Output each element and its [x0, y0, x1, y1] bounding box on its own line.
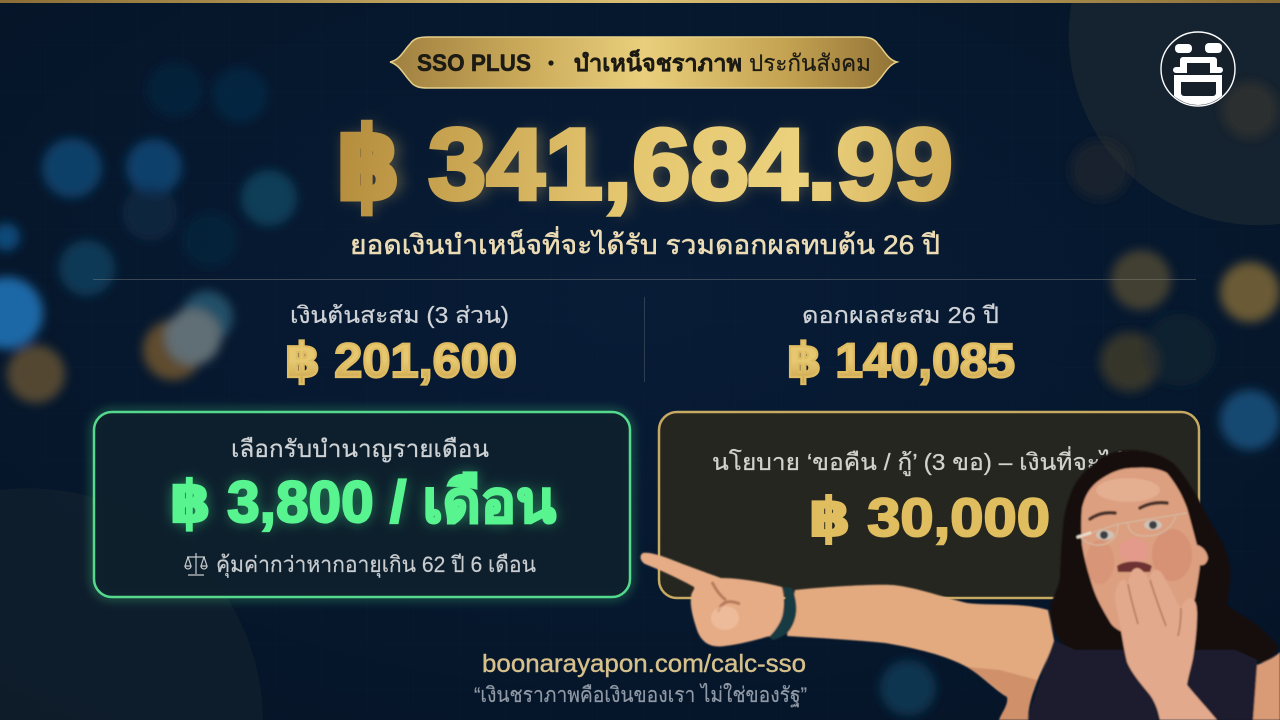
mouth shadow: [1117, 562, 1152, 572]
total amount: ฿ 341,684.99: [337, 109, 953, 221]
panel: monthly pension: คุ้มค่ากว่าหากอายุเกิน 62 ปี 6 เดือน: [216, 552, 536, 578]
divider: [93, 279, 1196, 280]
panel: monthly pension: เลือกรับบำนาญรายเดือน: [231, 436, 489, 463]
stat: principal: [285, 302, 517, 388]
cheek and forehead tones: [1152, 529, 1192, 581]
right shoulder: [1253, 652, 1280, 720]
total amount: ฿: [337, 109, 400, 221]
glasses: [1078, 513, 1187, 545]
panel: monthly pension: [94, 412, 630, 597]
icon: scales: [185, 553, 207, 575]
pointing hand: [641, 553, 784, 646]
badge: SSO PLUS: บำเหน็จชราภาพ: [574, 48, 742, 76]
person pointing: [641, 450, 1280, 720]
panel: monthly pension: ฿ 3,800 / เดือน: [170, 470, 556, 535]
finger lines: [1128, 580, 1181, 636]
logo badge: [1161, 32, 1235, 107]
wristband: [769, 587, 796, 640]
top gold bar: [0, 0, 1280, 3]
arm: [787, 585, 1054, 720]
badge: SSO PLUS: SSO PLUS: [417, 50, 531, 77]
panel: withdrawal policy: [659, 412, 1199, 598]
eyebrows: [1090, 503, 1167, 519]
stat: principal: เงินต้นสะสม (3 ส่วน): [290, 302, 509, 328]
footer quote: “เงินชราภาพคือเงินของเรา ไม่ใช่ของรัฐ”: [474, 683, 807, 707]
panel: withdrawal policy: ฿ 30,000: [809, 488, 1050, 548]
badge: SSO PLUS: ประกันสังคม: [749, 50, 871, 76]
stat: principal: ฿ 201,600: [285, 335, 517, 388]
stat: interest: ดอกผลสะสม 26 ปี: [802, 302, 999, 328]
total amount: 341,684.99: [428, 109, 953, 221]
hand over mouth: [1115, 568, 1217, 720]
stat: interest: ฿ 140,085: [787, 335, 1015, 388]
eyes: [1096, 530, 1114, 540]
subtitle: ยอดเงินบำเหน็จที่จะได้รับ รวมดอกผลทบต้น 26 ปี: [350, 226, 940, 260]
face: [1081, 468, 1208, 636]
panel: monthly pension: ฿ 3,800 / เดือน: [170, 470, 556, 535]
tank top: [1028, 640, 1257, 720]
footer link: boonarayapon.com/calc-sso: [482, 650, 806, 678]
hair: [1050, 450, 1278, 662]
panel: withdrawal policy: นโยบาย ‘ขอคืน / กู้’ (3 ขอ) – เงินที่จะได้รับ: [712, 446, 1157, 476]
nose: [1119, 538, 1149, 564]
badge: SSO PLUS: [390, 37, 897, 88]
arm shading: [967, 667, 1037, 720]
stat: interest: [787, 302, 1015, 388]
